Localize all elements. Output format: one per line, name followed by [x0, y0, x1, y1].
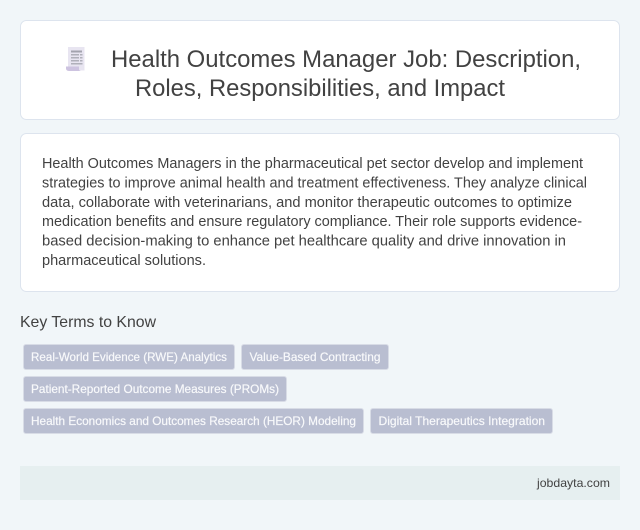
panel: header — [20, 20, 620, 120]
text block: description: strategies to improve animal health and treatment effectiveness. They analyze clinical — [42, 175, 587, 191]
chip: PROMs — [24, 376, 286, 402]
chip: real-world evidence — [24, 344, 234, 370]
chip: value-based contracting — [242, 344, 388, 370]
text block: description: medication benefits and ensure regulatory compliance. Their role supports evidence- — [42, 214, 582, 230]
text block: description: pharmaceutical solutions. — [42, 253, 206, 269]
footer: jobdayta.com — [536, 476, 610, 490]
heading: key terms: Key Terms to Know — [20, 314, 156, 331]
title: Health Outcomes Manager Job: Description, — [111, 46, 581, 73]
chip: real-world evidence: Real-World Evidence (RWE) Analytics — [31, 350, 227, 364]
panel: description — [20, 134, 620, 292]
text block: description: based decision-making to enhance pet healthcare quality and drive innovation in — [42, 234, 566, 250]
chip: digital therapeutics — [370, 408, 552, 434]
icon: document scroll — [66, 47, 84, 71]
title: Roles, Responsibilities, and Impact — [135, 75, 505, 102]
text block: description: Health Outcomes Managers in the pharmaceutical pet sector develop and implement — [42, 156, 583, 172]
text block: description — [42, 156, 587, 269]
text block: description: data, collaborate with veterinarians, and monitor therapeutic outcomes to optimize — [42, 195, 572, 211]
chip: value-based contracting: Value-Based Contracting — [250, 350, 380, 364]
chip: HEOR modeling — [24, 408, 364, 434]
footer — [20, 466, 620, 500]
chip: PROMs: Patient-Reported Outcome Measures (PROMs) — [31, 382, 279, 396]
chip: digital therapeutics: Digital Therapeutics Integration — [378, 414, 545, 428]
chip: HEOR modeling: Health Economics and Outcomes Research (HEOR) Modeling — [31, 414, 356, 428]
title — [111, 46, 581, 102]
